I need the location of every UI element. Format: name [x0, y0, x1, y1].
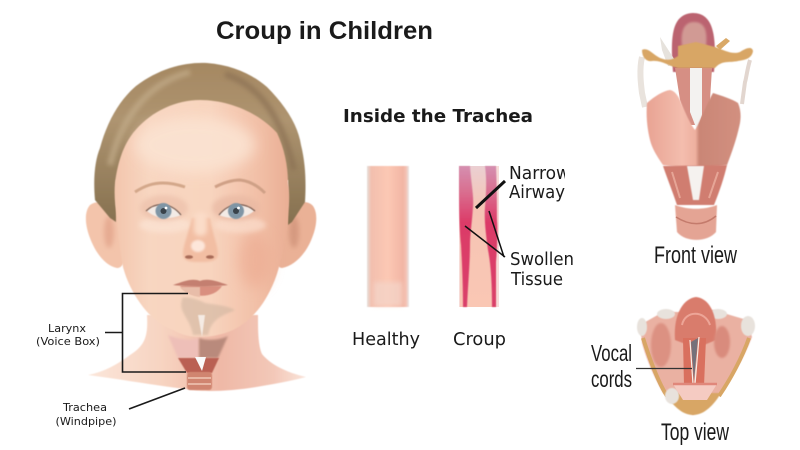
swollen tissue label: Swollen	[510, 250, 574, 270]
front view label: Front view	[654, 242, 737, 269]
trachea label	[56, 402, 116, 428]
top view label: Top view	[661, 419, 729, 446]
healthy trachea	[367, 166, 409, 307]
croup trachea	[459, 166, 499, 307]
white cartilage caps	[637, 309, 755, 404]
see-through larynx in chin	[181, 297, 235, 335]
title: Croup in Children	[216, 18, 433, 45]
thyroid cartilage	[647, 90, 741, 167]
see-through thyroid in neck	[168, 335, 199, 358]
subheading: Inside the Trachea	[343, 107, 533, 127]
eyebrows	[135, 183, 185, 192]
yellow rim	[643, 338, 749, 396]
front commissure	[673, 384, 717, 400]
mouth	[173, 280, 228, 297]
trachea label: (Windpipe)	[56, 416, 116, 428]
narrow airway label: Narrow	[509, 164, 570, 184]
narrow airway pointer	[476, 181, 505, 208]
hair	[94, 63, 306, 225]
left ear	[86, 202, 125, 268]
narrow airway label: Airway	[509, 183, 565, 203]
illustration: larynx front view	[640, 13, 753, 240]
larynx label	[36, 323, 100, 348]
swollen tissue label: Tissue	[510, 270, 563, 290]
larynx opening	[178, 358, 219, 373]
right ear	[276, 202, 316, 268]
healthy label: Healthy	[352, 330, 420, 350]
muscles behind	[675, 68, 712, 125]
trachea pointer line	[129, 388, 185, 409]
illustration: child's head and neck	[86, 63, 316, 391]
median white ligament	[690, 68, 702, 130]
right eye	[212, 195, 260, 221]
cricoid and tracheal rings	[675, 205, 717, 240]
larynx label: Larynx	[48, 323, 86, 335]
outer cartilage	[640, 310, 752, 415]
nose	[183, 212, 218, 262]
swollen tissue pointers	[465, 211, 505, 257]
epiglottis	[672, 13, 715, 72]
vocal folds	[683, 338, 696, 386]
glottis	[691, 338, 698, 381]
narrow airway label	[509, 160, 575, 203]
posterior wall	[675, 297, 716, 345]
vocal cords label: cords	[591, 366, 632, 392]
vocal cords pointer	[636, 368, 692, 370]
swollen tissue label	[510, 250, 574, 290]
larynx label: (Voice Box)	[36, 336, 100, 348]
left ligament	[640, 57, 645, 107]
cricothyroid muscles	[663, 165, 727, 205]
vocal cords label: Vocal	[591, 340, 632, 366]
croup label: Croup	[453, 330, 506, 350]
left eye	[140, 195, 188, 221]
larynx bracket line	[105, 294, 188, 372]
trachea label: Trachea	[62, 402, 107, 414]
membrane	[660, 37, 678, 66]
neck and shoulders	[88, 315, 306, 391]
hyoid bone	[642, 42, 753, 68]
yellow anterior cartilage	[665, 393, 721, 415]
right ligament	[742, 60, 750, 104]
illustration: larynx top view	[637, 297, 755, 415]
face	[115, 100, 289, 337]
trachea rings	[187, 372, 212, 390]
side folds	[651, 323, 671, 367]
vocal cords label	[591, 340, 632, 392]
